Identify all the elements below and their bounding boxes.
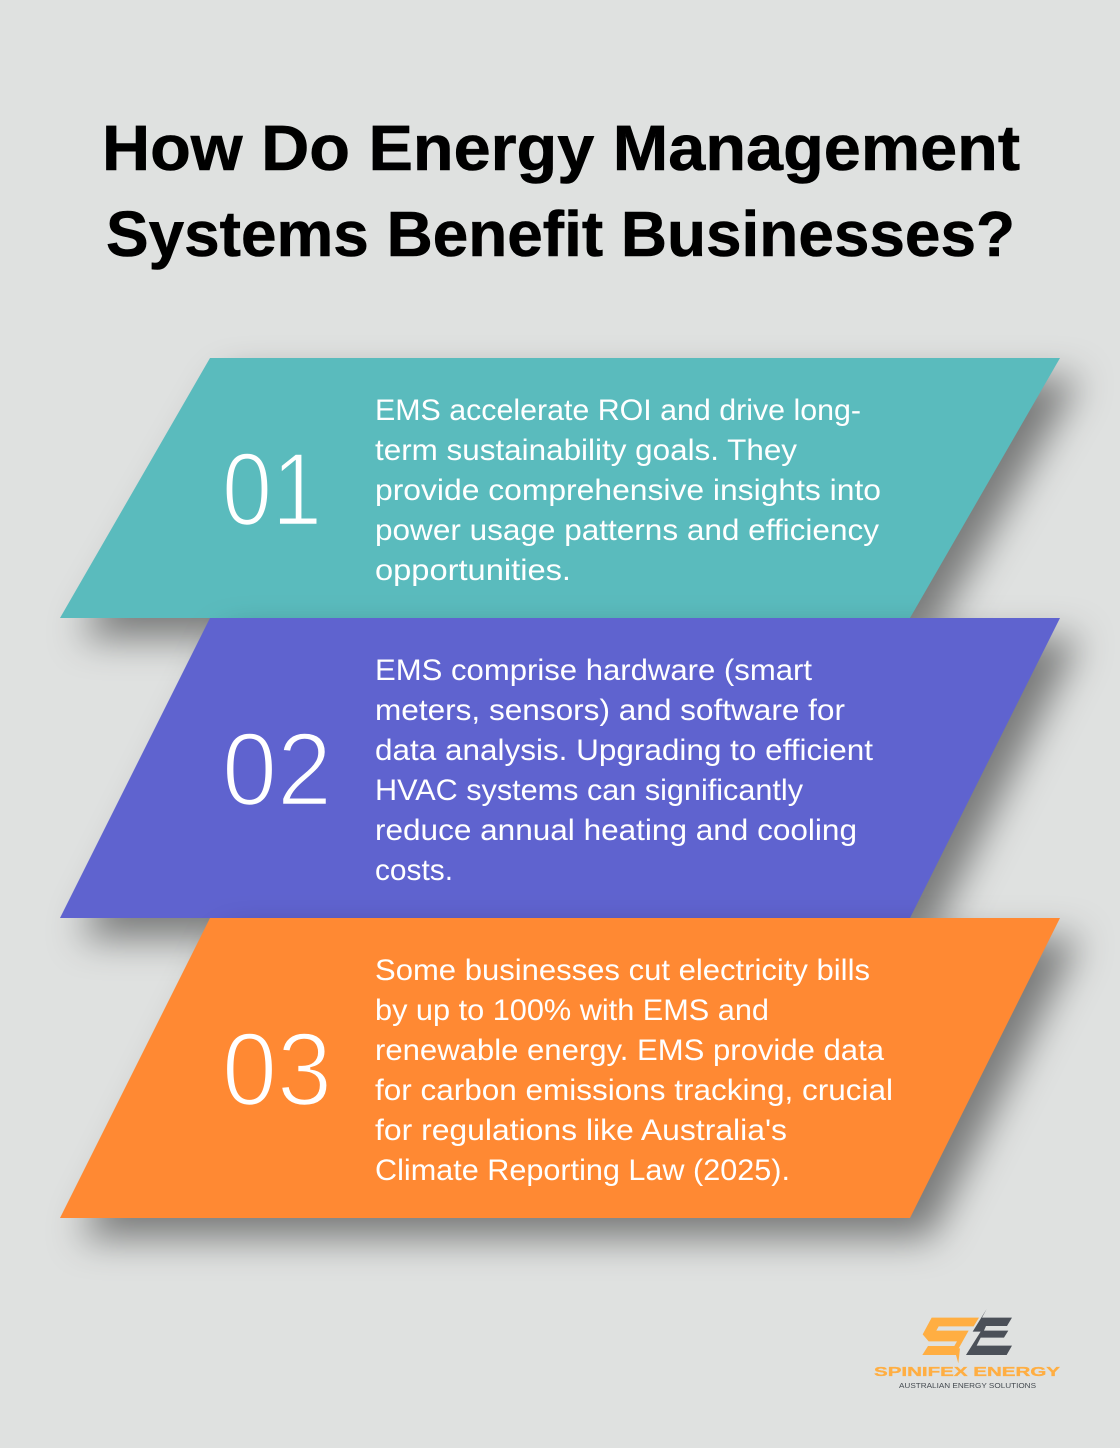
text block 01: term sustainability goals. They [375,434,797,467]
text block 01: EMS accelerate ROI and drive long- [375,394,861,427]
text block 02: data analysis. Upgrading to efficient [375,734,874,767]
text block 03: Some businesses cut electricity bills [375,954,870,987]
text block 01: power usage patterns and efficiency [375,514,879,547]
text block 02: HVAC systems can significantly [375,774,803,807]
number 01: 01 [222,432,322,548]
text block 03: by up to 100% with EMS and [375,994,769,1027]
title [102,112,1020,270]
text block 03: renewable energy. EMS provide data [375,1034,884,1067]
text block 02 [375,654,874,887]
logo: Spinifex Energy [874,1309,1061,1390]
tagline: AUSTRALIAN ENERGY SOLUTIONS [899,1383,1036,1390]
text block 03: for regulations like Australia's [375,1114,787,1147]
text block 02: costs. [375,854,453,887]
title: How Do Energy Management [102,112,1020,184]
panel: step 03 [60,918,1080,1238]
number 03: 03 [222,1012,332,1128]
title: Systems Benefit Businesses? [106,198,1015,270]
text block 03 [375,954,893,1187]
icon: SE lightning mark [922,1309,1012,1363]
text block 03: for carbon emissions tracking, crucial [375,1074,893,1107]
brand name: SPINIFEX ENERGY [874,1364,1061,1379]
panel: step 01 [60,358,1080,638]
text block 02: meters, sensors) and software for [375,694,845,727]
text block 01 [375,394,881,587]
text block 02: reduce annual heating and cooling [375,814,857,847]
number 02: 02 [222,712,332,828]
text block 02: EMS comprise hardware (smart [375,654,813,687]
panel: step 02 [60,618,1080,938]
text block 01: opportunities. [375,554,571,587]
text block 01: provide comprehensive insights into [375,474,881,507]
text block 03: Climate Reporting Law (2025). [375,1154,790,1187]
